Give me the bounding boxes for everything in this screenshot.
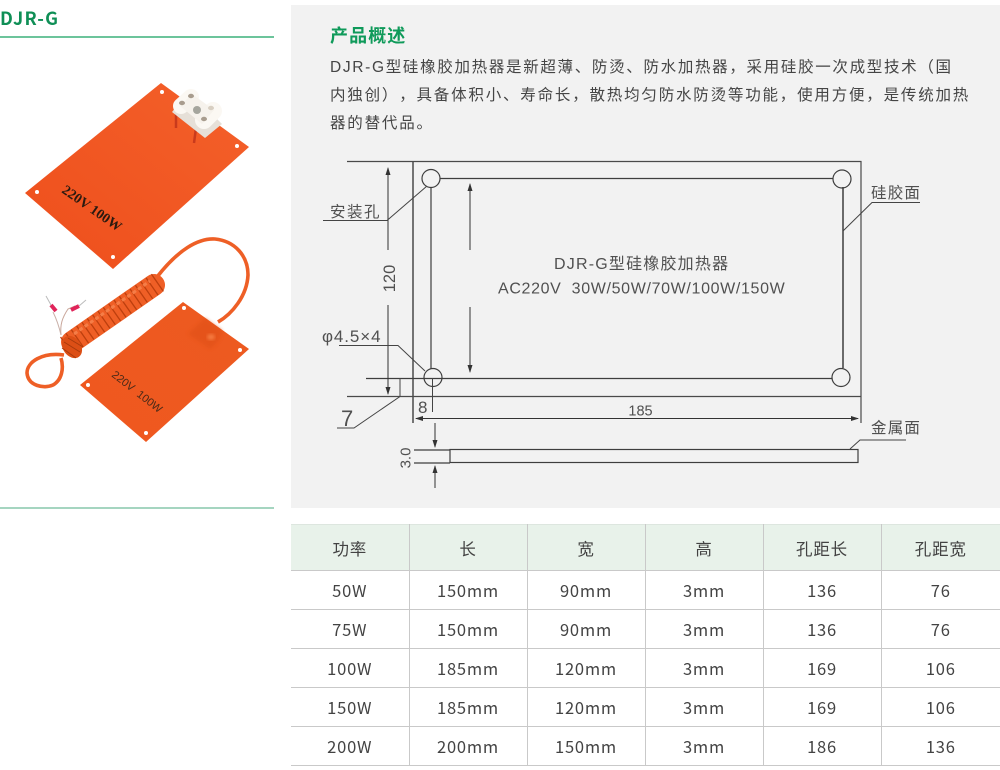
callout: hole diameter bbox=[322, 327, 425, 371]
photo: heater with coiled cable bbox=[27, 239, 249, 442]
specification table: 75W bbox=[332, 617, 367, 641]
center label: DJR-G型硅橡胶加热器 bbox=[554, 255, 729, 273]
specification table: 150mm bbox=[437, 578, 499, 602]
specification table: 长 bbox=[459, 536, 477, 560]
specification table: 136 bbox=[807, 617, 837, 641]
specification table: 3mm bbox=[683, 578, 725, 602]
side view bbox=[414, 450, 858, 463]
specification table: 120mm bbox=[555, 695, 617, 719]
specification table: 169 bbox=[807, 695, 837, 719]
silicone inner outline and mounting holes bbox=[366, 170, 851, 386]
specification table: 高 bbox=[695, 536, 713, 560]
callout: mounting hole: 安装孔 bbox=[330, 203, 381, 221]
specification table: 150mm bbox=[555, 734, 617, 758]
specification table: 76 bbox=[931, 617, 951, 641]
specification table: 150mm bbox=[437, 617, 499, 641]
dimension: 8 bbox=[418, 378, 432, 417]
specification table: 50W bbox=[332, 578, 367, 602]
left column bottom rule bbox=[0, 507, 274, 509]
specification table: 106 bbox=[926, 656, 956, 680]
dimension: 8: 8 bbox=[418, 398, 427, 417]
specification table: 3mm bbox=[683, 734, 725, 758]
dimension: 7: 7 bbox=[341, 406, 353, 431]
callout: silicone face bbox=[843, 184, 921, 231]
specification table: 3mm bbox=[683, 656, 725, 680]
specification table: 3mm bbox=[683, 695, 725, 719]
product photos bbox=[25, 83, 250, 442]
dimension: 7 bbox=[337, 378, 400, 431]
dimension: 120: 120 bbox=[381, 265, 399, 292]
specification table: 169 bbox=[807, 656, 837, 680]
specification table: 136 bbox=[926, 734, 956, 758]
dimension: 3.0 bbox=[398, 423, 435, 488]
specification table: 120mm bbox=[555, 656, 617, 680]
specification table: 150W bbox=[327, 695, 372, 719]
callout: silicone face: 硅胶面 bbox=[871, 184, 921, 202]
description line 3: 器的替代品。 bbox=[330, 115, 434, 132]
specification table: 185mm bbox=[437, 656, 499, 680]
heading: product overview: 产品概述 bbox=[330, 22, 406, 48]
center label: AC220V 30W/50W/70W/100W/150W bbox=[498, 280, 786, 298]
photo: heater with coiled cable: 220V 100W bbox=[109, 369, 165, 416]
left column top rule bbox=[0, 36, 274, 38]
specification table bbox=[291, 524, 1000, 766]
model title: DJR-G bbox=[0, 5, 59, 31]
callout: metal face bbox=[850, 419, 921, 449]
specification table: 200mm bbox=[437, 734, 499, 758]
specification table: 200W bbox=[327, 734, 372, 758]
specification table: 孔距宽 bbox=[915, 536, 967, 560]
callout: mounting hole bbox=[323, 186, 427, 221]
center label bbox=[498, 255, 786, 298]
technical drawing bbox=[322, 160, 921, 488]
description line 2: 内独创），具备体积小、寿命长，散热均匀防水防烫等功能，使用方便，是传统加热 bbox=[330, 87, 970, 104]
callout: metal face: 金属面 bbox=[871, 419, 921, 437]
description line 1: DJR-G型硅橡胶加热器是新超薄、防烫、防水加热器，采用硅胶一次成型技术（国 bbox=[330, 59, 953, 76]
heater outer outline bbox=[347, 161, 862, 423]
specification table: 90mm bbox=[560, 617, 612, 641]
specification table: 136 bbox=[807, 578, 837, 602]
specification table: 76 bbox=[931, 578, 951, 602]
specification table: 3mm bbox=[683, 617, 725, 641]
specification table: 孔距长 bbox=[796, 536, 848, 560]
photo: heater with ceramic terminal: 220V 100W bbox=[59, 183, 124, 235]
specification table: 90mm bbox=[560, 578, 612, 602]
specification table: 185mm bbox=[437, 695, 499, 719]
dimension: 3.0: 3.0 bbox=[398, 448, 414, 468]
inner height arrows bbox=[469, 184, 471, 372]
specification table: 100W bbox=[327, 656, 372, 680]
photo: heater with ceramic terminal bbox=[25, 83, 249, 269]
specification table: 186 bbox=[807, 734, 837, 758]
callout: hole diameter: φ4.5×4 bbox=[322, 327, 381, 346]
specification table: 宽 bbox=[577, 536, 595, 560]
specification table: 106 bbox=[926, 695, 956, 719]
panel: product overview bbox=[291, 5, 1000, 508]
specification table: 功率 bbox=[332, 536, 367, 560]
dimension: 185: 185 bbox=[628, 404, 653, 420]
